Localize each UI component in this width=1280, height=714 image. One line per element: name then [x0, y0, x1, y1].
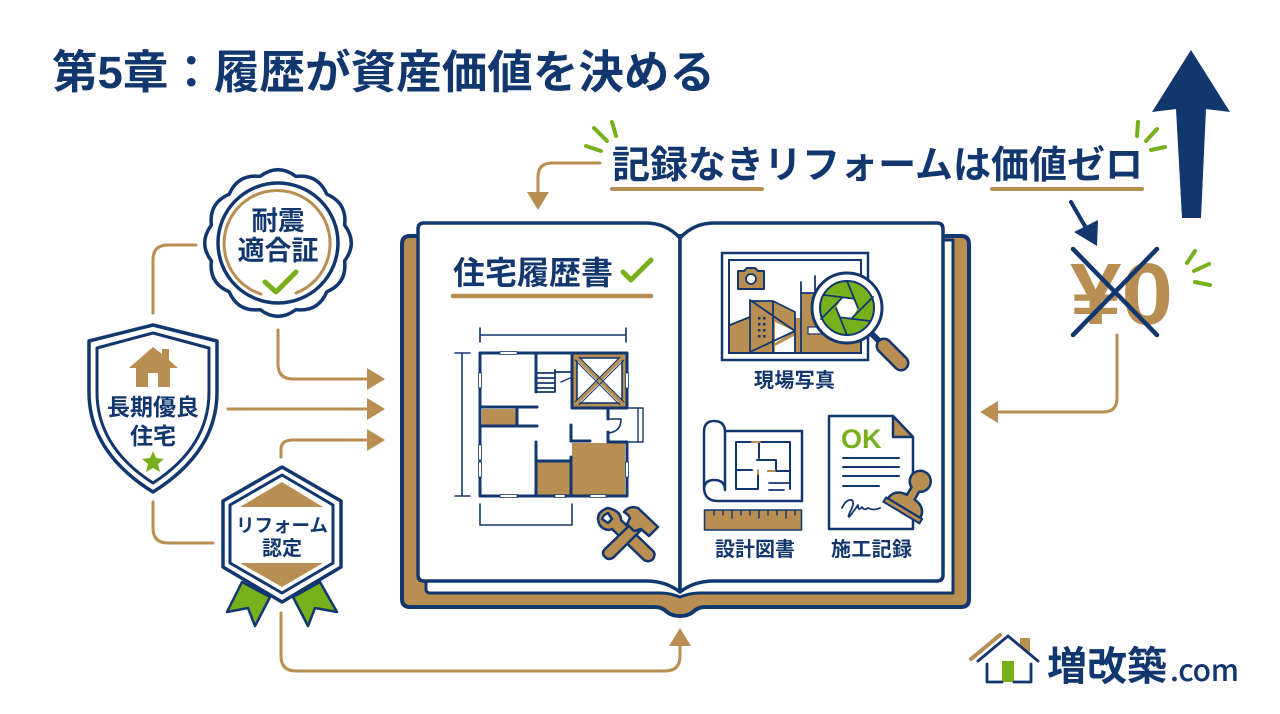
- sparkle right: [1137, 122, 1165, 150]
- arrow: reform badge to book bottom: [281, 613, 691, 671]
- label: site photo: 現場写真: [754, 369, 835, 392]
- connector: shield to seismic badge: [153, 245, 196, 313]
- arrow: callout to book: [527, 163, 600, 210]
- arrow: yen zero to book: [980, 335, 1117, 423]
- icon: camera: [738, 268, 764, 289]
- icon: logo house: [971, 635, 1038, 682]
- icon: wrench and hammer: [598, 507, 658, 561]
- hammer head: [624, 507, 658, 536]
- shield text: 長期優良: [107, 394, 199, 420]
- book cover: [402, 236, 969, 616]
- label: design drawings: 設計図書: [715, 538, 795, 561]
- icon: heading check: [623, 260, 651, 280]
- connector: shield to reform badge: [153, 502, 213, 543]
- badge text: リフォーム: [236, 515, 328, 536]
- callout text: 記録なきリフォームは価値ゼロ: [612, 145, 1143, 187]
- buildings: [730, 276, 860, 352]
- badge text: 耐震: [252, 206, 304, 236]
- stairs: [536, 370, 571, 392]
- open book: [402, 223, 969, 616]
- icon: blueprint: [704, 421, 802, 501]
- callout underline right: [992, 187, 1142, 191]
- back pages: [426, 240, 953, 597]
- icon: house: [129, 347, 178, 387]
- icon: magnifier with aperture: [812, 273, 901, 363]
- sparkle near yen: [1187, 251, 1210, 285]
- badge: reform certification: [223, 467, 341, 626]
- door and porch: [608, 408, 643, 442]
- gold rooms: [482, 353, 627, 495]
- arrow: reform badge to book: [281, 429, 385, 457]
- arrow: shield to book: [228, 398, 385, 420]
- wrench: [598, 508, 654, 561]
- badge: long-life quality housing shield: [89, 325, 217, 492]
- floor plan: [455, 328, 643, 525]
- arrow: callout to yen zero: [1071, 202, 1098, 246]
- stamp: [883, 461, 944, 523]
- label: construction record: 施工記録: [831, 538, 912, 561]
- x room: [577, 358, 622, 403]
- hammer handle: [603, 522, 641, 559]
- title: 第5章：履歴が資産価値を決める: [52, 47, 715, 98]
- right page: [680, 223, 943, 592]
- heading underline: [453, 294, 651, 298]
- badge: seismic certificate: 適合証: [238, 236, 318, 266]
- dimension lines: [455, 328, 626, 525]
- icon: construction document: [829, 416, 944, 529]
- callout: no record, no value: [586, 122, 1165, 189]
- badge: reform certification: 認定: [262, 537, 302, 560]
- ribbons: [227, 582, 337, 626]
- icon: star: [142, 451, 164, 472]
- callout underline left: [612, 187, 762, 191]
- yen zero crossed out: ¥0: [1070, 246, 1173, 343]
- badge: long-life quality housing shield: 住宅: [130, 423, 176, 449]
- sparkle left: [586, 122, 616, 151]
- icon: ruler: [704, 510, 802, 530]
- page heading: 住宅履歴書: [453, 255, 613, 291]
- left page: [418, 223, 680, 592]
- big upward arrow: [1152, 50, 1230, 218]
- logo: [971, 635, 1239, 690]
- logo text: 増改築: [1047, 645, 1167, 689]
- icon: construction document: OK: [841, 424, 882, 454]
- logo domain: .com: [1170, 646, 1239, 690]
- windows: [478, 352, 628, 498]
- arrow: seismic badge to book: [278, 330, 385, 390]
- walls: [480, 353, 627, 496]
- site photo: [722, 253, 868, 360]
- badge: seismic certificate: [205, 170, 351, 316]
- icon: check: [265, 272, 296, 292]
